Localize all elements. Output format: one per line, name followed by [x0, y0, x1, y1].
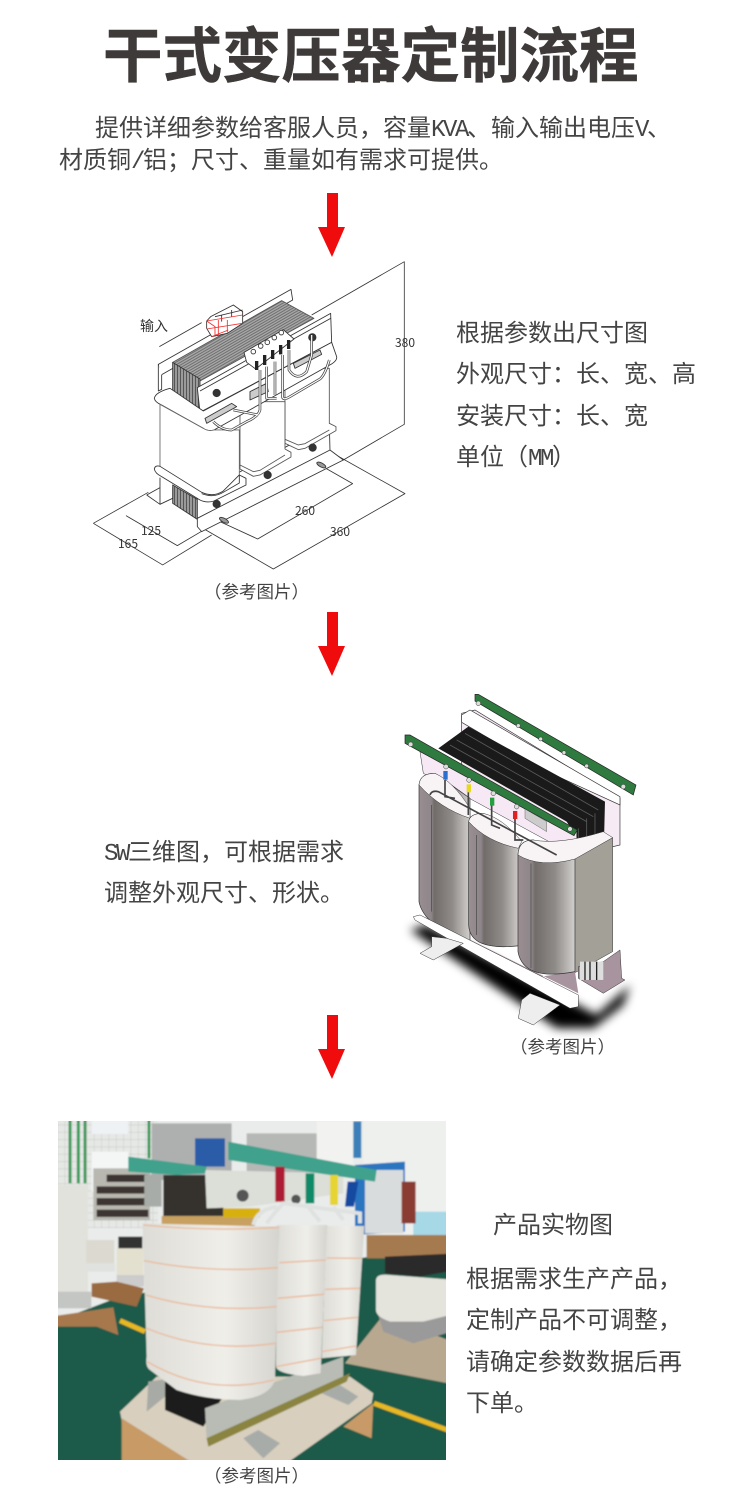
text: product heading: 产品实物图 — [493, 1205, 613, 1240]
front bottom flange — [154, 466, 246, 502]
caption 3: （参考图片） — [204, 1463, 309, 1488]
coil right — [285, 368, 336, 450]
text: SW 3D — [104, 832, 344, 908]
yellow floor stripes — [120, 1321, 457, 1433]
terminal — [525, 809, 547, 832]
stored transformers — [50, 1185, 88, 1292]
text: product notes: 下单。 — [466, 1383, 538, 1418]
front frame — [420, 752, 577, 857]
base — [413, 915, 578, 1008]
laminations — [438, 727, 605, 842]
intro text: 材质铜/铝；尺寸、重量如有需求可提供。 — [59, 140, 503, 176]
core — [173, 301, 314, 381]
dimension labels: 360 — [330, 523, 350, 540]
dimension labels: 165 — [118, 535, 138, 552]
green bus bars — [228, 1142, 377, 1182]
text: size drawing: 根据参数出尺寸图 — [456, 313, 648, 348]
text: product notes: 根据需求生产产品， — [466, 1259, 682, 1294]
coil 3 — [518, 840, 575, 974]
bolts — [213, 500, 220, 508]
dimension labels: 输入 — [140, 316, 168, 336]
pallet — [120, 1377, 373, 1463]
output terminal block — [244, 330, 294, 370]
title: 干式变压器定制流程 — [103, 9, 638, 95]
caption 1: （参考图片） — [204, 579, 309, 604]
dimension labels: 380 — [395, 334, 415, 351]
text: product notes — [466, 1259, 682, 1418]
base plate — [197, 423, 343, 532]
back frame — [158, 289, 293, 376]
coil front — [143, 1223, 280, 1400]
text: SW 3D: SW三维图，可根据需求 — [104, 832, 344, 868]
coil 1 — [419, 773, 470, 945]
dimension labels: 260 — [295, 502, 315, 519]
text: size drawing: 单位（MM） — [456, 437, 576, 473]
leads — [430, 780, 557, 855]
3D model image — [404, 694, 636, 1036]
top flange — [154, 342, 337, 431]
coil 3 side — [573, 838, 613, 973]
text: product notes: 定制产品不可调整， — [466, 1300, 682, 1335]
orange tape bands — [143, 1225, 362, 1385]
drawing: dimension diagram — [93, 261, 415, 570]
caption 2: （参考图片） — [510, 1034, 615, 1059]
intro text: 提供详细参数给客服人员，容量KVA、输入输出电压V、 — [95, 108, 671, 144]
text: size drawing — [456, 313, 696, 473]
text: product notes: 请确定参数数据后再 — [466, 1342, 682, 1377]
front coil — [160, 404, 239, 496]
dimension labels: 125 — [141, 522, 161, 539]
text: size drawing: 外观尺寸：长、宽、高 — [456, 354, 696, 389]
arrow: down 1 — [318, 193, 345, 257]
green bars — [475, 694, 636, 795]
intro text — [59, 108, 671, 176]
left bracket — [147, 478, 173, 504]
copper leads — [213, 335, 329, 430]
shadow — [410, 925, 630, 1028]
cables — [275, 1167, 285, 1202]
dimension labels — [118, 316, 415, 552]
coil middle — [240, 402, 291, 476]
coil right — [322, 1226, 364, 1358]
background equipment — [152, 1123, 232, 1180]
arrow: down 3 — [318, 1015, 345, 1079]
base plate — [205, 1357, 343, 1440]
text: size drawing: 安装尺寸：长、宽 — [456, 396, 648, 431]
input terminal block — [207, 305, 243, 337]
coil 2 — [469, 813, 520, 947]
arrow: down 2 — [318, 612, 345, 676]
back frame — [462, 710, 620, 855]
dimension lines — [93, 262, 405, 569]
front frame — [197, 313, 332, 412]
background wall and floor — [50, 1110, 457, 1470]
base plate back — [420, 915, 578, 993]
bolts on bars — [408, 701, 626, 831]
top frame and core — [163, 1175, 223, 1217]
coil middle — [276, 1225, 327, 1376]
text: SW 3D: 调整外观尺寸、形状。 — [104, 873, 344, 908]
product photo — [58, 1121, 446, 1460]
